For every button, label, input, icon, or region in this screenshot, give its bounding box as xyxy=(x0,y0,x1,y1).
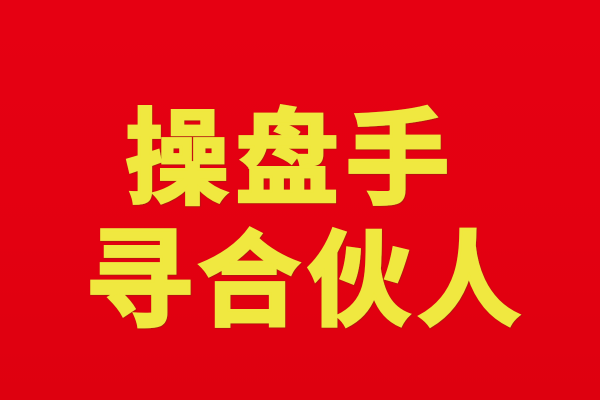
title: first line: 操 xyxy=(125,102,229,218)
title: second line: 寻 xyxy=(84,220,194,342)
title: first line: 盘 xyxy=(235,102,339,218)
title: first line: 手 xyxy=(345,102,450,218)
title: first line xyxy=(125,102,450,218)
title: second line: 伙 xyxy=(307,224,411,340)
title: second line: 人 xyxy=(417,224,521,340)
title: second line xyxy=(84,220,521,342)
title: second line: 合 xyxy=(197,224,301,340)
